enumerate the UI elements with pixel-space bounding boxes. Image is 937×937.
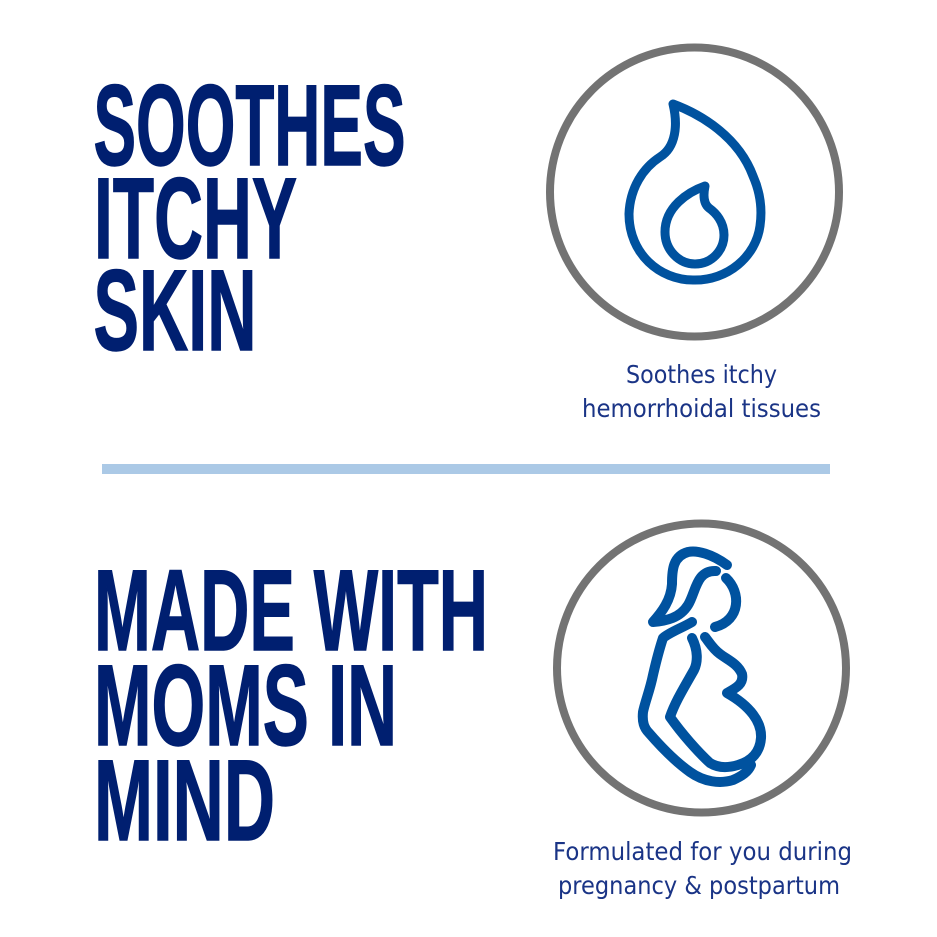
caption: soothes itchy: Soothes itchy [626, 360, 777, 389]
heading: made with moms in mind: MADE WITH [94, 547, 488, 675]
heading: made with moms in mind: MOMS IN [94, 642, 397, 770]
caption: soothes itchy [582, 360, 821, 423]
icon: pregnant woman in circle [557, 524, 846, 812]
heading: made with moms in mind [94, 547, 488, 865]
divider [102, 464, 830, 474]
caption: formulated for you: Formulated for you during [553, 837, 852, 866]
heading: soothes itchy skin: ITCHY [94, 155, 297, 283]
caption: formulated for you [553, 837, 852, 900]
caption: formulated for you: pregnancy & postpartum [558, 871, 840, 900]
heading: made with moms in mind: MIND [94, 737, 275, 865]
heading: soothes itchy skin: SOOTHES [94, 62, 406, 190]
icon: flame in circle [550, 48, 839, 336]
heading: soothes itchy skin: SKIN [94, 247, 256, 375]
heading: soothes itchy skin [94, 62, 406, 375]
caption: soothes itchy: hemorrhoidal tissues [582, 394, 821, 423]
